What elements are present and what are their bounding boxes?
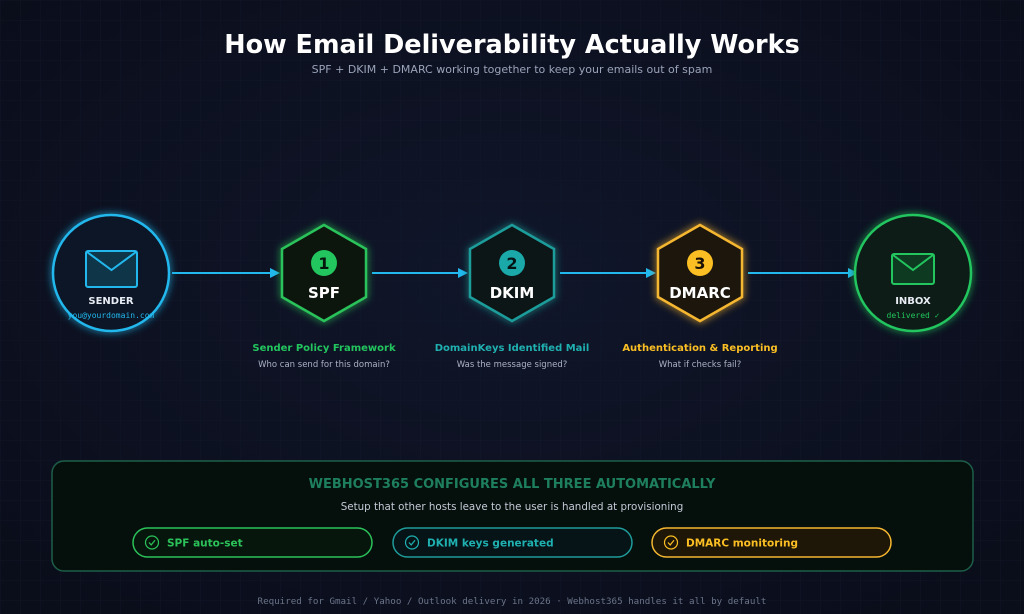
pill: DKIM keys generated: DKIM keys generated — [427, 538, 554, 550]
icon: envelope inbox — [892, 254, 934, 284]
pill: DKIM keys generated — [393, 528, 632, 557]
caption: DMARC: What if checks fail? — [659, 360, 741, 370]
caption: SPF — [252, 343, 396, 370]
node: SPF hexagon: 1 — [318, 254, 330, 273]
node: DKIM hexagon — [470, 225, 554, 321]
arrow: DKIM to DMARC — [560, 272, 654, 274]
node: SPF hexagon — [282, 225, 366, 321]
node: inbox: INBOX — [895, 296, 931, 307]
caption: DKIM: DomainKeys Identified Mail — [435, 343, 589, 354]
node: DKIM hexagon: DKIM — [490, 284, 534, 302]
node: sender: you@yourdomain.com — [68, 311, 155, 320]
pill: SPF auto-set — [133, 528, 372, 557]
caption: SPF: Who can send for this domain? — [258, 360, 390, 370]
node: sender — [53, 215, 169, 331]
caption: DMARC: Authentication & Reporting — [622, 343, 778, 354]
node: sender: SENDER — [88, 296, 134, 307]
arrow: DMARC to inbox — [748, 272, 856, 274]
icon: envelope sender — [86, 251, 137, 287]
caption: DMARC — [622, 343, 778, 370]
node: DKIM hexagon: 2 — [506, 254, 518, 273]
pill: SPF auto-set: SPF auto-set — [167, 538, 243, 550]
node: inbox — [855, 215, 971, 331]
panel: webhost365 — [52, 461, 973, 571]
panel: webhost365: Setup that other hosts leave to the user is handled at provisioning — [341, 501, 683, 513]
caption: DKIM: Was the message signed? — [457, 360, 567, 370]
caption: SPF: Sender Policy Framework — [252, 343, 396, 354]
node: inbox: delivered ✓ — [887, 311, 940, 320]
panel: webhost365: WEBHOST365 CONFIGURES ALL THREE AUTOMATICALLY — [309, 477, 716, 492]
caption: DKIM — [435, 343, 589, 370]
footer: Required for Gmail / Yahoo / Outlook delivery in 2026 · Webhost365 handles it all by default — [258, 596, 766, 607]
pill: DMARC monitoring — [652, 528, 891, 557]
arrow: sender to SPF — [172, 272, 278, 274]
pill: DMARC monitoring: DMARC monitoring — [686, 538, 798, 550]
arrow: SPF to DKIM — [372, 272, 466, 274]
subtitle: SPF + DKIM + DMARC working together to keep your emails out of spam — [312, 63, 712, 76]
node: DMARC hexagon: DMARC — [669, 284, 731, 302]
node: DMARC hexagon: 3 — [694, 254, 706, 273]
title: How Email Deliverability Actually Works — [224, 30, 800, 60]
node: DMARC hexagon — [658, 225, 742, 321]
node: SPF hexagon: SPF — [308, 284, 340, 302]
